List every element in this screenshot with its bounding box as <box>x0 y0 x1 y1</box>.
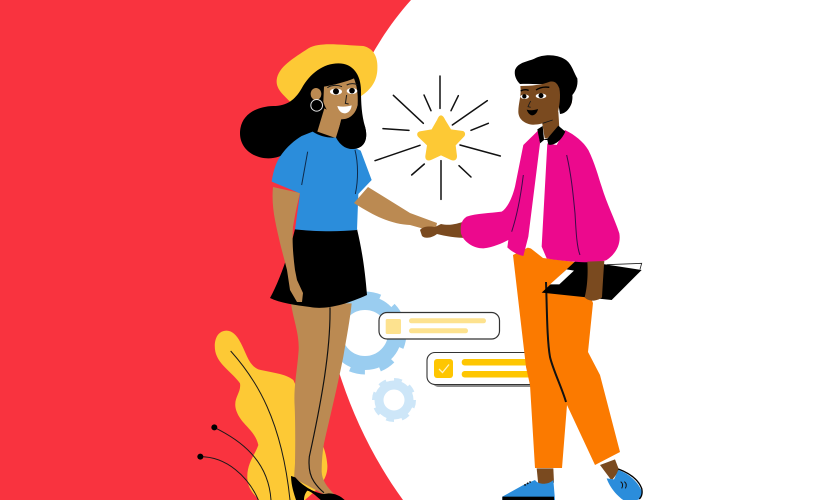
rays <box>375 76 500 199</box>
jacket seams <box>512 155 580 255</box>
ear <box>311 88 321 100</box>
right arm <box>354 187 437 232</box>
face <box>518 81 560 125</box>
neck <box>542 112 559 140</box>
shoes and feet <box>502 459 642 500</box>
icon: large gear <box>328 296 402 370</box>
trousers <box>513 247 620 468</box>
folder <box>542 260 642 300</box>
upper body <box>240 63 372 231</box>
hair lock over shirt <box>336 105 366 149</box>
eyes <box>330 88 342 95</box>
shirt front <box>527 138 548 252</box>
trouser crease <box>546 282 566 402</box>
red background shape <box>0 0 411 500</box>
stems <box>200 351 290 500</box>
plant <box>197 331 327 500</box>
hoop earring <box>311 99 322 111</box>
star <box>417 115 465 160</box>
left arm <box>273 187 303 302</box>
skirt <box>270 229 367 308</box>
checklist card: checked <box>427 352 541 387</box>
eyes <box>520 94 529 99</box>
shirt <box>272 132 372 231</box>
stem dots <box>211 424 217 430</box>
leg line <box>309 307 330 493</box>
mouth <box>527 109 538 115</box>
leaf <box>215 331 327 500</box>
collar <box>537 126 565 145</box>
man's hand in handshake <box>420 221 468 238</box>
ear <box>558 93 572 109</box>
face <box>323 78 358 119</box>
hair <box>240 63 366 158</box>
hair <box>515 55 578 114</box>
woman <box>240 44 437 500</box>
legs <box>291 303 352 500</box>
nose and jaw line <box>528 101 553 123</box>
ear detail <box>561 98 568 105</box>
checklist card: pending <box>379 312 500 339</box>
man <box>420 55 642 500</box>
sleeve seams <box>302 150 358 194</box>
jacket <box>461 131 540 256</box>
high heel <box>291 476 345 500</box>
hat <box>277 44 377 102</box>
smile <box>337 105 352 113</box>
hand on folder <box>585 261 604 301</box>
brows and nose <box>327 84 357 104</box>
icon: small gear <box>374 380 414 420</box>
neck <box>317 108 342 138</box>
brows <box>521 87 549 91</box>
star burst <box>375 76 500 199</box>
